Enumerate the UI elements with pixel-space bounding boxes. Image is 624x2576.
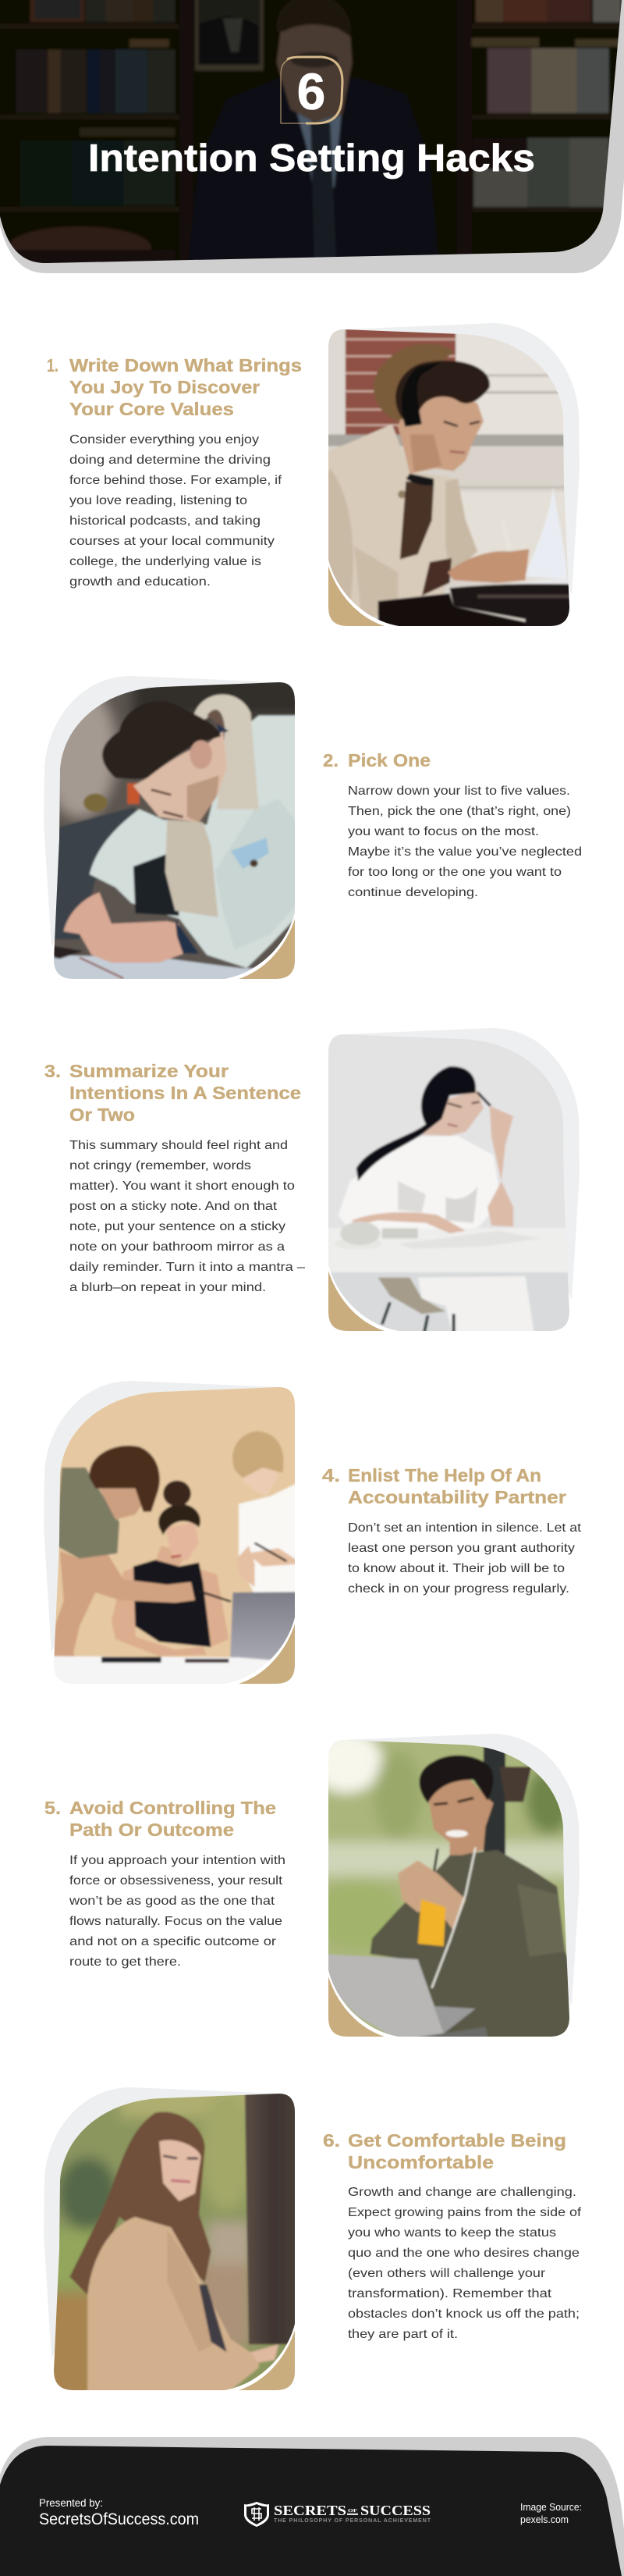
step 5 body text: force or obsessiveness, your result [69,1874,283,1888]
step 6 body text: quo and the one who desires change [348,2247,580,2260]
step 6 heading [323,2130,566,2172]
step 5 heading [44,1798,276,1840]
step 5 body text [69,1854,285,1969]
step 2 body text: for too long or the one you want to [348,866,562,879]
logo [244,2502,431,2527]
title: Intention Setting Hacks [88,137,535,180]
step 6 body text [348,2186,582,2341]
presented by: SecretsOfSuccess.com [39,2510,199,2528]
badge number: 6 [297,62,325,120]
step 3 heading: Or Two [69,1105,135,1125]
step 1 body text: force behind those. For example, if [69,474,282,487]
step 3 body text: a blurb–on repeat in your mind. [69,1281,266,1294]
logo tagline: THE PHILOSOPHY OF PERSONAL ACHIEVEMENT [274,2518,431,2524]
step 1 body text: historical podcasts, and taking [69,514,261,528]
image source: Image Source: [520,2501,582,2513]
step 3 body text [69,1139,305,1294]
step 3 body text: note on your bathroom mirror as a [69,1240,285,1254]
step 3 body text: daily reminder. Turn it into a mantra – [69,1261,305,1274]
logo wordmark: OF [348,2508,357,2514]
step 5 heading: 5. [44,1798,61,1818]
step 1 heading [47,355,302,419]
step 4 body text: to know about it. Their job will be to [348,1562,565,1575]
panel: step 2 [44,676,581,979]
step 2 heading: 2. [323,750,339,770]
step 3 body text: This summary should feel right and [69,1139,288,1152]
step 2 heading: Pick One [348,750,431,770]
step 6 body text: (even others will challenge your [348,2267,546,2280]
step 5 body text: route to get there. [69,1955,181,1969]
step 5 body text: flows naturally. Focus on the value [69,1915,282,1928]
step 5 heading: Path Or Outcome [69,1820,234,1840]
step 3 body text: post on a sticky note. And on that [69,1200,278,1213]
step 4 body text [348,1521,582,1596]
step 5 body text: If you approach your intention with [69,1854,285,1867]
step 2 body text: Narrow down your list to five values. [348,785,570,798]
step 1 body text: you love reading, listening to [69,494,247,507]
step 4 heading: Accountability Partner [348,1487,566,1507]
panel: step 1 [47,318,589,640]
step 5 body text: won’t be as good as the one that [69,1895,275,1908]
step 6 photo: woman in tan coat by tree [44,2087,295,2390]
step 3 body text: matter). You want it short enough to [69,1179,295,1193]
step 6 body text: transformation). Remember that [348,2287,552,2300]
panel: step 3 [44,1023,589,1340]
step 6 heading: 6. [323,2130,340,2151]
step 2 body text: Then, pick the one (that’s right, one) [348,805,571,818]
logo wordmark [274,2503,431,2518]
step 2 body text: continue developing. [348,886,478,899]
presented by: Presented by: [39,2496,103,2509]
step 6 heading: Uncomfortable [348,2152,494,2172]
number badge [281,57,342,123]
step 1 heading: You Joy To Discover [69,377,260,397]
step 1 photo: student with headphones writing [328,323,580,626]
step 3 body text: note, put your sentence on a sticky [69,1220,285,1233]
step 1 body text [69,433,282,589]
step 1 heading: 1. [47,355,58,375]
step 3 heading: 3. [44,1061,61,1081]
step 6 body text: they are part of it. [348,2328,458,2341]
step 4 heading: 4. [322,1465,340,1485]
step 6 heading: Get Comfortable Being [348,2130,566,2151]
header banner [0,0,624,283]
step 2 body text [348,785,582,899]
step 5 photo: smiling man with juice and laptop [328,1734,580,2037]
footer [0,2437,624,2576]
step 4 body text: Don’t set an intention in silence. Let at [348,1521,582,1535]
panel: step 5 [45,1734,580,2037]
step 2 photo: man in shearling jacket writing [44,676,295,979]
panel: step 6 [44,2087,581,2390]
step 3 photo: woman in white at desk [328,1028,580,1331]
logo wordmark: SUCCESS [360,2503,431,2518]
step 5 body text: and not on a specific outcome or [69,1935,277,1948]
step 6 body text: you who wants to keep the status [348,2226,556,2240]
step 1 body text: Consider everything you enjoy [69,433,259,447]
step 3 heading: Summarize Your [69,1061,229,1081]
step 4 body text: least one person you grant authority [348,1542,575,1555]
step 1 body text: doing and determine the driving [69,454,271,467]
step 1 body text: college, the underlying value is [69,555,261,568]
step 1 body text: growth and education. [69,575,211,589]
step 6 body text: Expect growing pains from the side of [348,2206,582,2219]
presented by [39,2496,199,2528]
step 1 heading: Write Down What Brings [69,355,302,375]
step 4 heading [322,1465,566,1507]
panel: step 4 [40,1376,582,1694]
step 3 body text: not cringy (remember, words [69,1159,251,1172]
step 2 body text: you want to focus on the most. [348,825,539,838]
step 4 body text: check in on your progress regularly. [348,1582,569,1596]
step 4 photo: three colleagues at laptop [44,1381,295,1684]
image source: pexels.com [520,2514,569,2525]
step 1 body text: courses at your local community [69,535,275,548]
step 3 heading [44,1061,301,1125]
step 2 body text: Maybe it’s the value you’ve neglected [348,845,582,859]
step 5 heading: Avoid Controlling The [69,1798,276,1818]
logo wordmark: SECRETS [274,2503,346,2518]
step 6 body text: Growth and change are challenging. [348,2186,576,2199]
step 4 heading: Enlist The Help Of An [348,1465,541,1485]
step 6 body text: obstacles don’t knock us off the path; [348,2307,580,2321]
image source [520,2501,582,2525]
icon: shield [244,2502,269,2527]
header photo: man in library [0,0,624,283]
step 1 heading: Your Core Values [69,399,234,419]
step 3 heading: Intentions In A Sentence [69,1083,301,1103]
